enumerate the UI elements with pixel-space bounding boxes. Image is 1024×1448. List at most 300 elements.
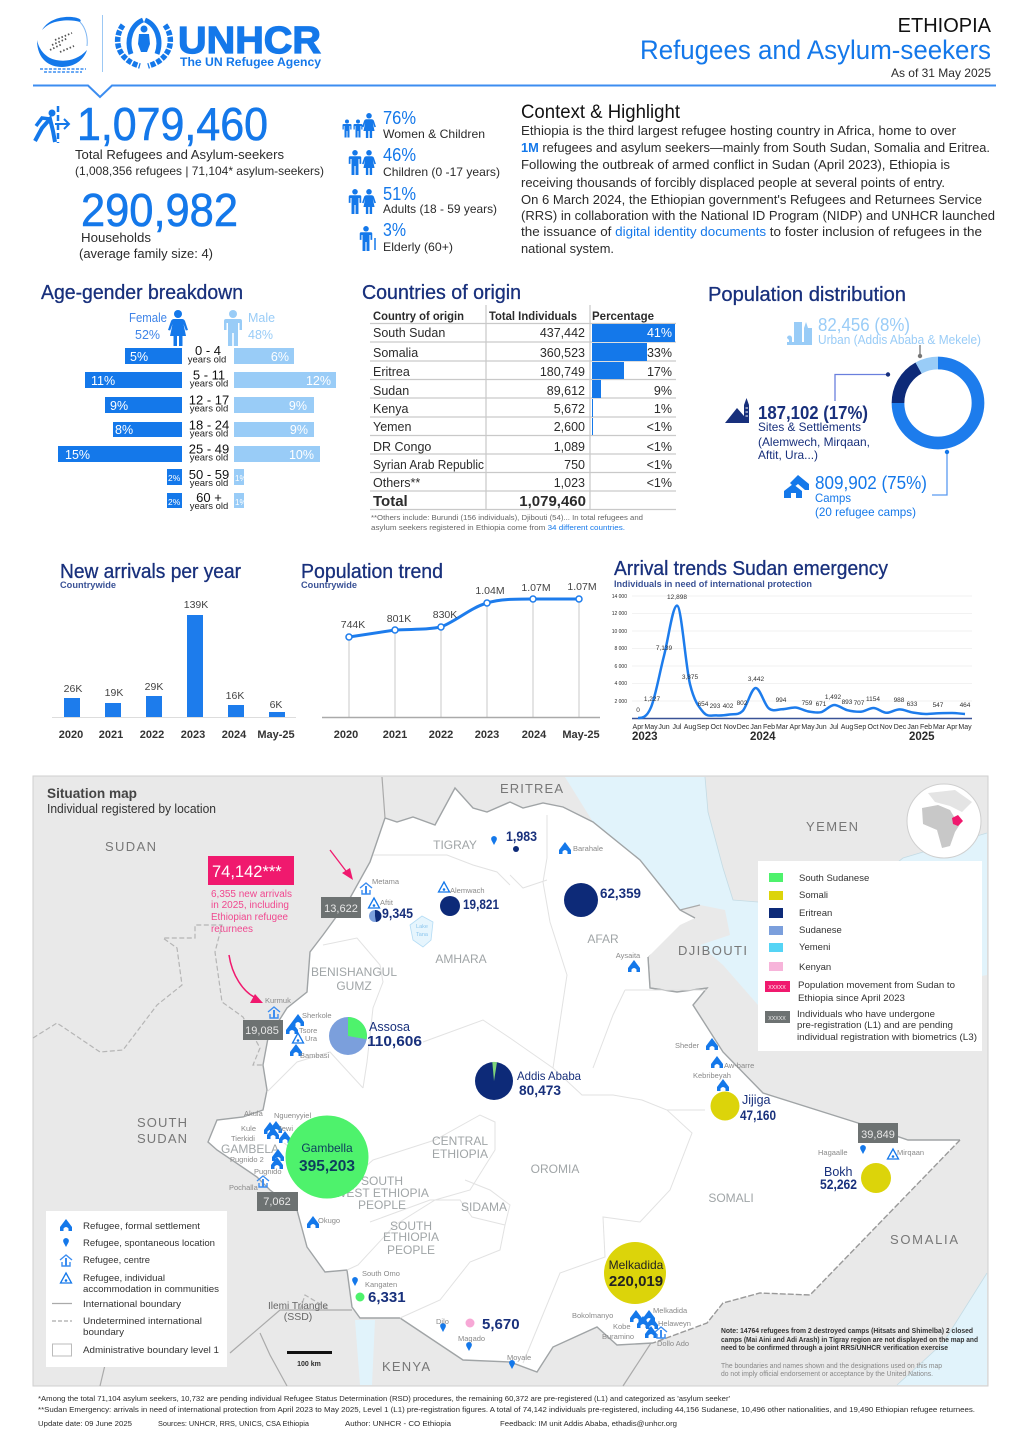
panel: situation map	[33, 776, 988, 1386]
bar chart: 139K	[184, 599, 208, 611]
line chart: Jan	[750, 724, 762, 731]
table: South Sudan	[373, 326, 445, 340]
total population	[75, 98, 324, 178]
location names: South Omo	[362, 1269, 400, 1278]
line chart: 464	[960, 702, 971, 709]
bar chart: 2022	[140, 729, 164, 741]
line chart: 802	[737, 700, 748, 707]
sites and settlements	[725, 398, 870, 462]
line chart: Jun	[658, 724, 670, 731]
camps: 809,902 (75%)	[815, 473, 927, 493]
country labels: KENYA	[382, 1359, 432, 1374]
line chart: 830K	[433, 609, 457, 621]
camps: (20 refugee camps)	[815, 505, 916, 519]
line chart: 633	[907, 701, 918, 708]
country labels: SOMALIA	[890, 1232, 960, 1247]
age labels: 60 +	[196, 490, 222, 505]
header	[33, 15, 996, 97]
region labels: ETHIOPIA	[432, 1147, 488, 1161]
footer notes: Feedback: IM unit Addis Ababa, ethadis@unhcr.org	[500, 1419, 677, 1428]
location names: Helaweyn	[658, 1319, 691, 1328]
line chart: 1,227	[644, 696, 661, 703]
region labels: PEOPLE	[387, 1243, 435, 1257]
line chart: 4 000	[614, 681, 627, 687]
map title: Situation map	[47, 785, 137, 801]
line chart: May	[801, 724, 815, 731]
line chart: 2024	[522, 729, 547, 741]
table: Eritrea	[373, 365, 410, 379]
children: 46%	[383, 145, 416, 165]
gender key: Male	[248, 311, 275, 325]
line chart: 2024	[750, 731, 776, 743]
line chart: 1,492	[825, 694, 842, 701]
line chart: 2022	[429, 729, 453, 741]
legend: nationality	[758, 861, 982, 1051]
context and highlight: the issuance of digital identity documents to foster inclusion of refugees in the	[521, 224, 982, 239]
line chart: Sep	[697, 724, 709, 731]
footer notes: *Among the total 71,104 asylum seekers, 10,732 are pending individual Refugee Status Determination (RSD) procedures, the remaining 60,372 are pre-registered (L1) and categorized as 'asylum seeker'	[38, 1394, 731, 1403]
globe locator	[907, 784, 981, 858]
population bubbles: Addis Ababa	[517, 1069, 581, 1083]
country labels: SUDAN	[137, 1131, 189, 1146]
heading: Individuals in need of international protection	[614, 579, 812, 590]
legend: symbols	[46, 1211, 227, 1367]
location names: Magado	[458, 1334, 485, 1343]
region labels: AMHARA	[435, 952, 487, 966]
table: <1%	[647, 440, 672, 454]
bar chart: 2021	[99, 729, 123, 741]
line chart: 2025	[909, 731, 935, 743]
administrative boundaries	[267, 815, 707, 1363]
location names: Kobe	[613, 1322, 631, 1331]
table: 360,523	[540, 346, 585, 360]
total population: Total Refugees and Asylum-seekers	[75, 147, 284, 162]
panel: arrival trends Sudan emergency	[612, 557, 972, 743]
heading: Countrywide	[60, 580, 116, 591]
location names: Sherkole	[302, 1011, 332, 1020]
population bubbles: 6,331	[368, 1289, 406, 1306]
table: 2,600	[554, 420, 585, 434]
line chart: 2021	[383, 729, 407, 741]
legend: nationality: Population movement from Sudan to	[798, 980, 955, 991]
age labels: years old	[188, 354, 226, 366]
table: Yemen	[373, 420, 412, 434]
table: <1%	[647, 458, 672, 472]
location names: Metama	[372, 877, 400, 886]
heading: Countrywide	[301, 580, 357, 591]
line chart: 10 000	[612, 629, 627, 635]
region labels: BENISHANGUL	[311, 965, 397, 979]
logo: refugee emblem	[37, 17, 87, 72]
bar values	[65, 350, 331, 507]
children	[349, 145, 500, 179]
population bubbles: Gambella	[301, 1141, 353, 1155]
population bubbles: Melkadida	[609, 1258, 664, 1272]
location names: Mirqaan	[897, 1148, 924, 1157]
legend: nationality: individual registration with biometrics (L3)	[797, 1032, 977, 1043]
scale bar	[287, 1351, 332, 1368]
line chart: 2020	[334, 729, 358, 741]
households: Households	[81, 230, 152, 245]
table: 1,023	[554, 476, 585, 490]
line chart: 7,139	[656, 645, 673, 652]
heading: Countries of origin	[362, 282, 521, 304]
bar chart	[52, 599, 296, 741]
location names: Jewi	[278, 1124, 293, 1133]
callout: Sudan emergency arrivals: 6,355 new arrivals	[211, 889, 292, 900]
urban	[787, 315, 981, 347]
bar values: 9%	[289, 399, 307, 413]
heading	[614, 557, 889, 590]
age labels: years old	[190, 501, 228, 512]
heading: Population distribution	[708, 284, 906, 306]
footer notes	[38, 1394, 975, 1428]
legend: symbols: accommodation in communities	[83, 1284, 219, 1295]
women and children	[342, 108, 485, 141]
line chart: 8 000	[614, 646, 627, 652]
age labels: 0 - 4	[195, 343, 221, 358]
total population: (1,008,356 refugees | 71,104* asylum-seekers)	[75, 164, 324, 178]
sites and settlements: Aftit, Ura...)	[758, 448, 818, 462]
registration boxes: 19,085	[245, 1025, 279, 1037]
population bubbles: 110,606	[367, 1033, 422, 1050]
age labels: years old	[190, 428, 228, 440]
population bubbles: 52,262	[820, 1177, 857, 1192]
map notes: do not imply official endorsement or acceptance by the United Nations.	[721, 1371, 933, 1378]
context and highlight: receiving thousands of forcibly displaced people at several points of entry.	[521, 175, 945, 190]
footer notes: Sources: UNHCR, RRS, UNICS, CSA Ethiopia	[158, 1419, 310, 1428]
international boundary	[208, 788, 960, 1372]
table: 89,612	[547, 384, 585, 398]
line chart: 12 000	[612, 611, 627, 617]
bar values: 15%	[65, 448, 90, 462]
population bubbles: 9,345	[382, 906, 413, 921]
legend: symbols: Refugee, spontaneous location	[83, 1238, 215, 1249]
line chart: 0	[636, 707, 640, 714]
bar chart: 19K	[105, 687, 123, 699]
gender key: 52%	[135, 328, 160, 342]
table: <1%	[647, 420, 672, 434]
legend: nationality: xxxxx	[768, 984, 786, 991]
table: 5,672	[554, 402, 585, 416]
households	[79, 184, 238, 261]
country labels: YEMEN	[806, 819, 860, 834]
line chart: Nov	[724, 724, 737, 731]
line chart: Feb	[920, 724, 932, 731]
table: 1,089	[554, 440, 585, 454]
population bubbles: 47,160	[740, 1108, 776, 1123]
line chart: Oct	[868, 724, 878, 731]
location names: Tsore	[299, 1026, 317, 1035]
location names: Barahale	[573, 844, 603, 853]
map title: Individual registered by location	[47, 802, 216, 816]
callout: Sudan emergency arrivals: returnees	[211, 924, 253, 935]
connectors	[835, 345, 949, 495]
Lake Tana: Lake	[416, 924, 428, 930]
camps	[784, 473, 927, 519]
map notes: need to be confirmed through a joint RRS/UNHCR verification exercise	[721, 1345, 948, 1352]
line chart: Aug	[684, 724, 696, 731]
region labels: GUMZ	[336, 979, 372, 993]
neighbouring country boundaries	[100, 777, 707, 1386]
arrow: toward Metama	[330, 850, 353, 880]
line chart: 707	[854, 700, 865, 707]
table: Country of origin	[373, 309, 464, 323]
legend: symbols: Refugee, individual	[83, 1273, 165, 1284]
age labels: years old	[190, 452, 228, 464]
panel: new arrivals per year	[52, 560, 296, 741]
registration boxes: 39,849	[861, 1129, 895, 1141]
footer notes: **Sudan Emergency: arrivals in need of international protection from April 2023 to May 2025, Level 1 (L1) pre-registration figures. A total of 74,142 individuals pre-registered, including 44,156 Sudanese, 10,496 other nationalities, and 19,490 Ethiopian refugee returnees.	[38, 1405, 975, 1414]
line chart: Nov	[880, 724, 893, 731]
location names: Melkadida	[653, 1306, 688, 1315]
country labels: (SSD)	[284, 1311, 312, 1323]
line chart: Apr	[633, 724, 644, 731]
line chart: Oct	[711, 724, 721, 731]
panel: population distribution	[708, 284, 981, 519]
location names: Pugnido	[254, 1167, 282, 1176]
region labels: WEST ETHIOPIA	[335, 1186, 429, 1200]
title: ETHIOPIA	[898, 15, 992, 37]
callout: Sudan emergency arrivals: 74,142***	[212, 863, 282, 881]
population bubbles: 5,670	[482, 1316, 520, 1333]
logo: UNHCR emblem	[118, 20, 170, 66]
heading: Population trend	[301, 560, 443, 583]
line chart: 12,898	[667, 594, 687, 601]
population bubbles: Bokh	[824, 1165, 853, 1179]
country labels: DJIBOUTI	[678, 943, 749, 958]
population bubbles: 220,019	[609, 1273, 663, 1290]
line chart: 547	[933, 702, 944, 709]
location names: Aw-barre	[724, 1061, 754, 1070]
age labels: 18 - 24	[189, 418, 229, 432]
line chart: Apr	[947, 724, 958, 731]
location names: Bokolmanyo	[572, 1311, 613, 1320]
callout: Sudan emergency arrivals	[208, 856, 294, 935]
population bubbles: 19,821	[463, 897, 499, 912]
table: <1%	[647, 476, 672, 490]
camps: Camps	[815, 491, 851, 505]
legend: nationality: Somali	[799, 890, 828, 901]
adults: Adults (18 - 59 years)	[383, 202, 497, 216]
donut chart	[898, 363, 978, 443]
site icons	[257, 836, 898, 1369]
sites and settlements: (Alemwech, Mirqaan,	[758, 435, 870, 449]
age labels: 25 - 49	[189, 442, 229, 456]
location names: Aftit	[380, 898, 394, 907]
context and highlight: Context & Highlight	[521, 101, 681, 123]
legend: symbols: Refugee, formal settlement	[83, 1221, 200, 1232]
age labels: 5 - 11	[193, 368, 225, 382]
bar chart: 2024	[222, 729, 247, 741]
region labels: SOUTH	[390, 1219, 432, 1233]
location names: Alemwach	[450, 886, 485, 895]
map notes	[721, 1328, 978, 1378]
context and highlight: Following the outbreak of armed conflict in Sudan (April 2023), Ethiopia is	[521, 157, 951, 172]
population bubbles: Assosa	[369, 1020, 410, 1034]
line chart: Aug	[841, 724, 853, 731]
panel: age-gender breakdown	[41, 282, 336, 512]
line chart: 988	[894, 697, 905, 704]
line chart: Mar	[776, 724, 789, 731]
bar chart: 6K	[270, 699, 282, 711]
legend: nationality: pre-registration (L1) and are pending	[797, 1020, 953, 1031]
bars male	[234, 348, 336, 508]
legend: nationality: Sudanese	[799, 925, 842, 936]
region labels: ETHIOPIA	[383, 1230, 439, 1244]
legend: symbols: Administrative boundary level 1	[83, 1345, 219, 1356]
location names: Buramino	[602, 1332, 634, 1341]
scale bar: 100 km	[297, 1361, 321, 1368]
region labels: AFAR	[587, 932, 619, 946]
table: Total Individuals	[489, 309, 577, 323]
bars female	[58, 348, 182, 508]
heading: Age-gender breakdown	[41, 282, 243, 304]
line chart: 2023	[475, 729, 499, 741]
table	[370, 305, 676, 510]
total population: 1,079,460	[77, 98, 268, 150]
line chart: Jul	[830, 724, 839, 731]
location names: Akula	[244, 1109, 264, 1118]
table: Total	[373, 493, 408, 510]
bar values: 8%	[115, 423, 133, 437]
panel: countries of origin	[362, 282, 676, 532]
table: Syrian Arab Republic	[373, 458, 484, 472]
Lake Tana: Tana	[416, 932, 429, 938]
map notes: camps (Mai Aini and Adi Arash) in Tigray region are not displayed on the map and	[721, 1337, 978, 1344]
region labels	[221, 838, 754, 1257]
gender key: Female	[129, 311, 167, 325]
location names: Ura	[305, 1034, 318, 1043]
age labels: 50 - 59	[189, 467, 229, 482]
line chart: May	[958, 724, 972, 731]
line chart: 759	[802, 700, 813, 707]
table: 9%	[654, 384, 672, 398]
line chart: 14 000	[612, 594, 627, 600]
map base	[33, 776, 988, 1386]
line chart: 1154	[866, 696, 880, 703]
line chart: Apr	[790, 724, 801, 731]
line chart: 1.07M	[521, 582, 551, 594]
line chart: Feb	[763, 724, 775, 731]
line chart: 994	[776, 697, 787, 704]
population bubbles: Jijiga	[742, 1093, 771, 1107]
line chart: 671	[816, 701, 827, 708]
footer notes: Author: UNHCR - CO Ethiopia	[345, 1419, 452, 1428]
table: 1,079,460	[519, 493, 586, 510]
country labels	[105, 781, 960, 1374]
table: 41%	[647, 326, 672, 340]
bar chart: 29K	[145, 681, 163, 693]
bar chart: 26K	[64, 683, 82, 695]
line chart	[322, 581, 600, 741]
region labels: CENTRAL	[432, 1134, 488, 1148]
registration boxes: 7,062	[263, 1196, 291, 1208]
line chart: Sep	[854, 724, 866, 731]
table: 1%	[654, 402, 672, 416]
children: Children (0 -17 years)	[383, 165, 500, 179]
elderly: Elderly (60+)	[383, 240, 453, 254]
bar values: 9%	[290, 423, 308, 437]
bar values: 9%	[110, 399, 128, 413]
line chart: 1.07M	[567, 581, 597, 593]
map notes: Note: 14764 refugees from 2 destroyed camps (Hitsats and Shimelba) 2 closed	[721, 1328, 973, 1335]
line chart: Dec	[737, 724, 750, 731]
Lake Tana	[410, 916, 433, 947]
location names: Okugo	[318, 1216, 340, 1225]
table footnote	[371, 515, 643, 532]
title: As of 31 May 2025	[891, 66, 991, 80]
bar values: 5%	[130, 350, 148, 364]
table: 750	[564, 458, 585, 472]
context and highlight: (RRS) in collaboration with the National ID Program (NIDP) and UNHCR launched	[521, 208, 995, 223]
bar values: 11%	[91, 374, 115, 388]
location names: Kebribeyah	[693, 1071, 731, 1080]
age labels: years old	[190, 378, 228, 390]
table: 33%	[647, 346, 672, 360]
line chart: 3,442	[748, 676, 765, 683]
key figures	[35, 98, 324, 261]
age labels: years old	[190, 478, 228, 489]
bar values: 2%	[168, 473, 181, 483]
gender key	[129, 310, 275, 346]
bar values: 1%	[235, 474, 247, 483]
country labels: Ilemi Triangle	[268, 1300, 328, 1312]
bar values: 1%	[235, 498, 247, 507]
table: 180,749	[540, 365, 585, 379]
line chart: Dec	[894, 724, 907, 731]
age labels: years old	[190, 404, 228, 414]
table: Kenya	[373, 402, 408, 416]
line chart: May	[644, 724, 658, 731]
location names: Sheder	[675, 1041, 700, 1050]
registration boxes: 13,622	[324, 903, 358, 915]
callout: Sudan emergency arrivals: in 2025, including	[211, 900, 289, 911]
location names: Dilo	[436, 1317, 449, 1326]
location names: Pochalla	[229, 1183, 259, 1192]
context and highlight: national system.	[521, 241, 614, 256]
context and highlight: 1M refugees and asylum seekers—mainly from South Sudan, Somalia and Eritrea.	[521, 140, 990, 155]
bar chart: 16K	[226, 690, 244, 702]
heading: New arrivals per year	[60, 560, 241, 583]
location names: Hagaalle	[818, 1148, 848, 1157]
title: Refugees and Asylum-seekers	[640, 35, 991, 65]
table footnote: **Others include: Burundi (156 individuals), Djibouti (54)... In total refugees and	[371, 515, 643, 522]
legend: symbols: International boundary	[83, 1299, 181, 1310]
location names: Kangaten	[365, 1280, 397, 1289]
callout: Sudan emergency arrivals: Ethiopian refugee	[211, 912, 288, 923]
bar chart: 2023	[181, 729, 205, 741]
map notes: The boundaries and names shown and the designations used on this map	[721, 1363, 942, 1370]
Ethiopia	[208, 788, 960, 1372]
population bubbles	[286, 829, 891, 1333]
bar values: 6%	[271, 350, 289, 364]
line chart: Jul	[673, 724, 682, 731]
age labels: 12 - 17	[189, 392, 229, 408]
title	[640, 15, 992, 80]
region labels: OROMIA	[531, 1162, 579, 1176]
elderly: 3%	[383, 220, 406, 240]
adults: 51%	[383, 184, 416, 204]
sites and settlements: Sites & Settlements	[758, 420, 861, 434]
line chart: 654	[698, 701, 709, 708]
map title	[47, 785, 216, 816]
sites and settlements: 187,102 (17%)	[758, 403, 868, 423]
line chart: 893	[842, 699, 853, 706]
location names	[229, 844, 924, 1362]
location names: Aysaita	[616, 951, 641, 960]
line chart: 744K	[341, 619, 365, 631]
